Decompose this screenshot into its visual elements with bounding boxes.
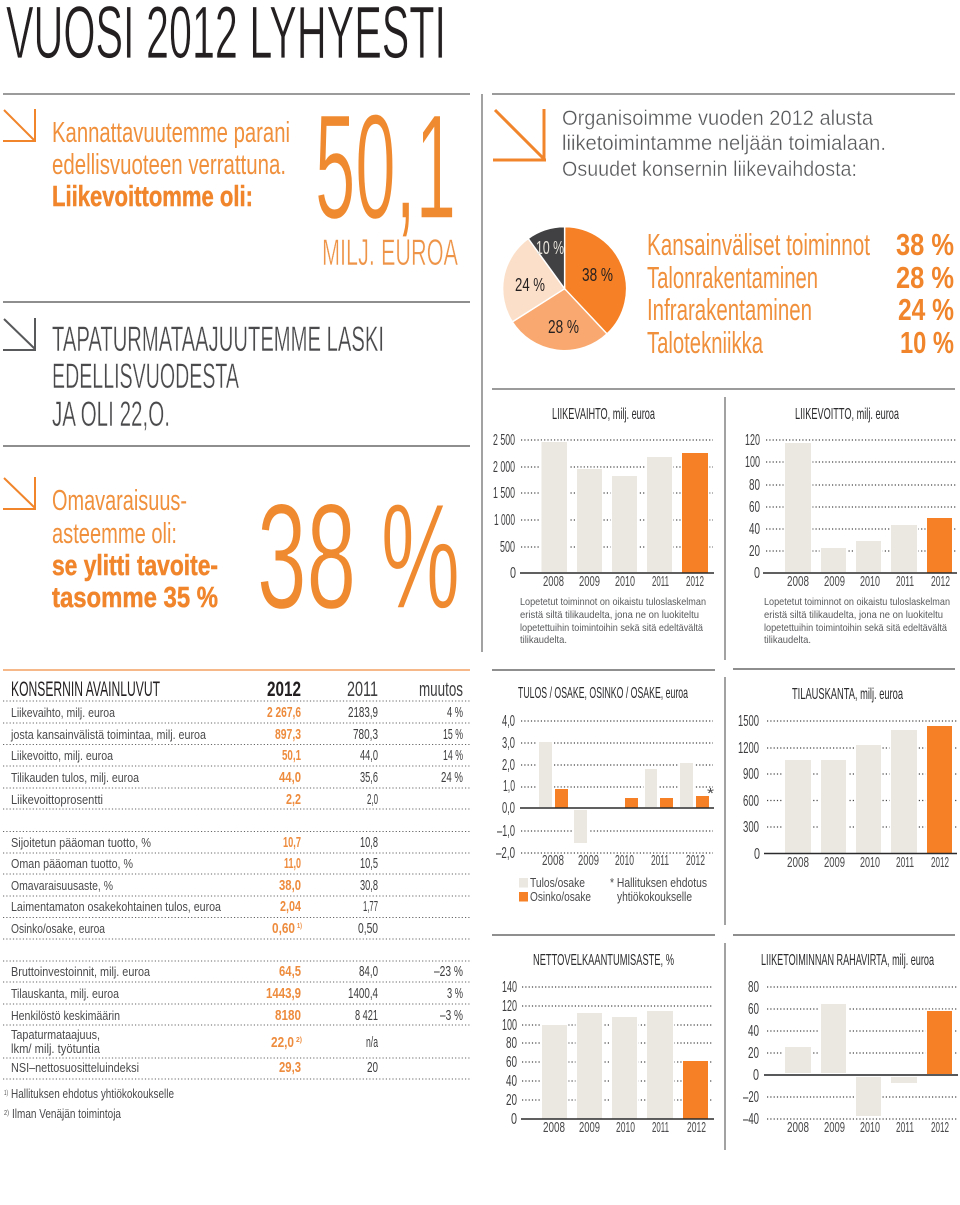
legend <box>519 876 707 904</box>
row labels: Omavaraisuusaste, % <box>11 879 113 893</box>
y axis labels: 0 <box>510 565 516 582</box>
y axis labels: 80 <box>748 979 759 996</box>
x axis labels: 2011 <box>896 573 914 590</box>
bars <box>539 742 709 843</box>
2012 values: 2) <box>296 1037 302 1044</box>
text: profitability statement <box>52 117 290 213</box>
change values: 14 % <box>443 747 463 764</box>
text: profitability statement: edellisvuoteen verrattuna. <box>52 149 286 181</box>
row labels: Oman pääoman tuotto, % <box>11 857 133 871</box>
x axis labels: 2010 <box>616 1119 635 1136</box>
y axis labels <box>745 432 760 582</box>
row labels: Laimentamaton osakekohtainen tulos, euroa <box>11 900 221 914</box>
x axis labels <box>542 852 705 869</box>
y axis labels: –40 <box>743 1111 759 1128</box>
chart title: LIIKEVAIHTO, milj. euroa <box>552 406 655 423</box>
y axis labels: 0,0 <box>502 800 515 817</box>
2011 values <box>348 704 378 1076</box>
row labels: josta kansainvälistä toimintaa, milj. euroa <box>10 728 206 742</box>
y axis labels: 0 <box>753 1067 759 1084</box>
y axis labels: 1,0 <box>503 778 515 795</box>
row labels: Liikevoitto, milj. euroa <box>11 749 113 763</box>
row labels: Bruttoinvestoinnit, milj. euroa <box>11 965 150 979</box>
legend: business area shares: Talonrakentaminen <box>647 260 818 295</box>
chart note: tilikaudelta. <box>764 634 811 646</box>
x axis labels <box>787 854 949 871</box>
y axis labels: 60 <box>749 499 760 516</box>
table: key figures <box>3 678 470 1121</box>
unit: million euros: MILJ. EUROA <box>322 232 458 273</box>
pie chart: 24 % <box>515 275 545 295</box>
text: equity ratio statement: tasomme 35 % <box>52 582 218 614</box>
x axis labels: 2010 <box>615 573 635 590</box>
y axis labels: –1,0 <box>497 823 515 840</box>
y axis labels: 120 <box>745 432 760 449</box>
table header: muutos <box>419 679 463 701</box>
2012 values: 0,60 <box>272 920 295 937</box>
text: accident frequency statement: EDELLISVUODESTA <box>52 357 239 396</box>
2011 values: 1,77 <box>363 898 378 915</box>
y axis labels: 1500 <box>738 713 759 730</box>
2012 values: 10,7 <box>283 834 301 851</box>
chart note <box>764 596 950 646</box>
icon: orange arrow <box>3 477 36 510</box>
2012 values: 2,2 <box>286 791 301 808</box>
bars <box>785 443 952 573</box>
text: organisation intro <box>562 107 886 181</box>
change values: –3 % <box>440 1007 463 1024</box>
2011 values: 20 <box>367 1059 378 1076</box>
table header <box>11 678 463 701</box>
y axis labels: 40 <box>506 1073 517 1090</box>
row labels: Tilauskanta, milj. euroa <box>11 987 119 1001</box>
asterisk marker: * <box>707 785 714 802</box>
x axis labels <box>787 573 950 590</box>
row labels: lkm/ milj. työtuntia <box>11 1042 100 1056</box>
2012 values: 1) <box>297 923 302 930</box>
x axis labels: 2012 <box>687 1119 706 1136</box>
x axis labels: 2009 <box>824 573 845 590</box>
x axis labels: 2008 <box>543 1119 565 1136</box>
y axis labels: –20 <box>743 1089 759 1106</box>
y axis labels: 40 <box>749 521 760 538</box>
2011 values: 35,6 <box>360 769 378 786</box>
2012 values: 1443,9 <box>266 985 301 1002</box>
2012 values: 50,1 <box>282 747 301 764</box>
y axis labels: 20 <box>749 543 760 560</box>
y axis labels: –2,0 <box>496 845 515 862</box>
row labels: NSI–nettosuositteluindeksi <box>11 1061 139 1075</box>
2012 values: 44,0 <box>279 769 301 786</box>
panel: accident frequency <box>3 318 384 434</box>
2011 values: 2,0 <box>367 791 378 808</box>
chart note: Lopetetut toiminnot on oikaistu tuloslaskelman <box>520 596 706 608</box>
x axis labels: 2012 <box>686 573 704 590</box>
bar chart: operating cash flow <box>743 952 958 1136</box>
y axis labels <box>743 979 759 1128</box>
y axis labels: 500 <box>500 539 515 556</box>
x axis labels: 2009 <box>578 852 599 869</box>
y axis labels: 120 <box>502 998 517 1015</box>
2012 values: 8180 <box>275 1007 301 1024</box>
2012 values: 2 267,6 <box>267 704 301 721</box>
panel: business areas <box>493 107 954 360</box>
2011 values: 84,0 <box>359 963 378 980</box>
2011 values: 0,50 <box>358 920 378 937</box>
x axis labels: 2011 <box>896 854 914 871</box>
y axis labels: 100 <box>745 454 760 471</box>
text: equity ratio statement: se ylitti tavoite- <box>52 550 218 582</box>
bar chart: net sales <box>493 406 714 646</box>
text: accident frequency statement: TAPATURMATAAJUUTEMME LASKI <box>52 320 384 359</box>
text: organisation intro: liiketoimintamme neljään toimialaan. <box>562 132 886 155</box>
y axis labels: 140 <box>502 979 517 996</box>
y axis labels: 80 <box>506 1035 517 1052</box>
change values: –23 % <box>434 963 463 980</box>
row labels: Liikevoittoprosentti <box>11 793 103 807</box>
pie chart: 38 % <box>582 265 613 285</box>
x axis labels: 2010 <box>860 854 880 871</box>
change values: 24 % <box>441 769 463 786</box>
x axis labels: 2012 <box>686 852 705 869</box>
2011 values: 1400,4 <box>348 985 378 1002</box>
text: profitability statement: Liikevoittomme oli: <box>52 181 253 213</box>
y axis labels: 1 000 <box>494 512 515 529</box>
x axis labels: 2011 <box>896 1119 914 1136</box>
x axis labels: 2008 <box>543 573 564 590</box>
row labels <box>10 706 221 1075</box>
row labels: Sijoitetun pääoman tuotto, % <box>11 836 151 850</box>
row labels: Tapaturmataajuus, <box>11 1028 100 1042</box>
text: equity ratio statement <box>52 485 218 614</box>
footnotes: Ilman Venäjän toimintoja <box>12 1107 121 1121</box>
x axis labels: 2008 <box>787 1119 809 1136</box>
y axis labels: 1200 <box>738 740 759 757</box>
y axis labels: 2,0 <box>502 757 515 774</box>
pie chart: 28 % <box>548 317 579 337</box>
y axis labels: 0 <box>511 1111 517 1128</box>
y axis labels: 40 <box>748 1023 759 1040</box>
y axis labels: 60 <box>748 1001 759 1018</box>
x axis labels <box>787 1119 949 1136</box>
2012 values: 897,3 <box>275 726 301 743</box>
change values <box>434 704 463 1024</box>
y axis labels: 0 <box>754 565 760 582</box>
x axis labels: 2009 <box>824 854 845 871</box>
bar chart: order book <box>738 686 957 871</box>
2011 values: 10,5 <box>360 855 378 872</box>
text: accident frequency statement: JA OLI 22,O. <box>52 395 170 434</box>
2011 values: 10,8 <box>360 834 378 851</box>
x axis labels: 2008 <box>787 573 809 590</box>
pie chart <box>503 227 627 351</box>
text: equity ratio statement: asteemme oli: <box>52 518 177 550</box>
change values: 4 % <box>447 704 463 721</box>
text: organisation intro: Osuudet konsernin liikevaihdosta: <box>562 158 857 181</box>
icon: orange arrow <box>3 109 36 142</box>
2012 values: 64,5 <box>279 963 301 980</box>
chart note: eristä siltä tilikaudelta, jona ne on luokiteltu <box>764 609 943 621</box>
y axis labels <box>493 432 516 582</box>
y axis labels: 3,0 <box>502 735 515 752</box>
chart note: eristä siltä tilikaudelta, jona ne on luokiteltu <box>520 609 699 621</box>
2012 values: 29,3 <box>279 1059 301 1076</box>
x axis labels: 2009 <box>579 1119 600 1136</box>
text: profitability statement: Kannattavuutemme parani <box>52 117 290 149</box>
y axis labels: 100 <box>502 1017 517 1034</box>
y axis labels: 4,0 <box>502 713 515 730</box>
x axis labels: 2010 <box>615 852 634 869</box>
change values: 15 % <box>443 726 463 743</box>
bars <box>542 442 708 573</box>
text: 50,1 <box>315 83 456 250</box>
footnotes: 1) <box>4 1090 8 1097</box>
chart note <box>520 596 706 646</box>
footnotes: 2) <box>4 1110 9 1117</box>
y axis labels: 20 <box>748 1045 759 1062</box>
big number: 38 %: 38 % <box>257 472 460 640</box>
chart title: NETTOVELKAANTUMISASTE, % <box>533 952 674 969</box>
legend: business area shares: Talotekniikka <box>647 325 763 360</box>
chart title: TULOS / OSAKE, OSINKO / OSAKE, euroa <box>518 685 688 702</box>
x axis labels: 2009 <box>824 1119 845 1136</box>
y axis labels: 80 <box>749 477 760 494</box>
y axis labels: 900 <box>743 766 759 783</box>
row labels: Liikevaihto, milj. euroa <box>11 706 115 720</box>
row labels: Henkilöstö keskimäärin <box>11 1009 120 1023</box>
x axis labels <box>543 573 704 590</box>
y axis labels <box>738 713 760 863</box>
y axis labels: 0 <box>754 846 760 863</box>
bar chart: operating profit <box>745 406 957 646</box>
2012 values <box>266 704 302 1076</box>
2011 values: 30,8 <box>360 877 378 894</box>
change values: 3 % <box>447 985 463 1002</box>
x axis labels <box>543 1119 706 1136</box>
text: equity ratio statement: Omavaraisuus- <box>52 485 187 517</box>
y axis labels <box>502 979 517 1128</box>
2011 values: 2183,9 <box>348 704 378 721</box>
y axis labels <box>496 713 515 862</box>
2012 values: 38,0 <box>279 877 301 894</box>
legend: Tulos/osake <box>530 876 585 890</box>
x axis labels: 2009 <box>579 573 600 590</box>
chart note: lopetettuihin toimintoihin sekä sitä edeltävältä <box>520 622 703 634</box>
x axis labels: 2011 <box>651 852 669 869</box>
2011 values: 44,0 <box>360 747 378 764</box>
row labels: Tilikauden tulos, milj. euroa <box>11 771 139 785</box>
table header: KONSERNIN AVAINLUVUT <box>11 678 160 701</box>
2011 values: 8 421 <box>355 1007 378 1024</box>
y axis labels: 2 000 <box>493 459 515 476</box>
x axis labels: 2010 <box>860 1119 880 1136</box>
row labels: Osinko/osake, euroa <box>11 922 105 936</box>
text: accident frequency statement <box>52 320 384 434</box>
chart note: tilikaudelta. <box>520 634 567 646</box>
y axis labels: 1 500 <box>493 485 515 502</box>
legend: Osinko/osake <box>530 890 591 904</box>
x axis labels: 2008 <box>542 852 564 869</box>
panel: equity ratio <box>3 472 460 640</box>
x axis labels: 2010 <box>860 573 880 590</box>
2012 values: 22,0 <box>271 1034 294 1051</box>
bar chart: net gearing <box>502 952 714 1136</box>
y axis labels: 600 <box>743 793 759 810</box>
y axis labels: 20 <box>506 1092 517 1109</box>
2012 values: 2,04 <box>280 898 301 915</box>
y axis labels: 300 <box>743 819 759 836</box>
bar chart: earnings and dividend per share <box>496 685 714 904</box>
y axis labels: 60 <box>506 1054 517 1071</box>
2011 values: n/a <box>366 1034 378 1051</box>
legend: * Hallituksen ehdotus <box>610 876 707 890</box>
legend: yhtiökokoukselle <box>617 890 692 904</box>
table header: 2012 <box>267 678 301 701</box>
bars <box>785 726 952 853</box>
legend: business area shares <box>647 227 954 360</box>
pie chart: 10 % <box>536 238 564 258</box>
text: organisation intro: Organisoimme vuoden 2012 alusta <box>562 107 873 130</box>
footnotes <box>4 1087 174 1121</box>
bars <box>542 1011 708 1119</box>
legend: business area shares: Infrarakentaminen <box>647 292 812 327</box>
panel: operating profit highlight <box>3 83 458 273</box>
x axis labels: 2008 <box>787 854 809 871</box>
y axis labels: 2 500 <box>493 432 515 449</box>
bars <box>785 1004 952 1116</box>
2012 values: 11,0 <box>284 855 301 872</box>
x axis labels: 2011 <box>652 573 669 590</box>
2011 values: 780,3 <box>353 726 378 743</box>
footnotes: Hallituksen ehdotus yhtiökokoukselle <box>11 1087 174 1101</box>
icon: grey arrow <box>3 318 36 351</box>
x axis labels: 2011 <box>652 1119 669 1136</box>
table header: 2011 <box>347 678 378 701</box>
icon: large orange arrow <box>493 109 546 161</box>
